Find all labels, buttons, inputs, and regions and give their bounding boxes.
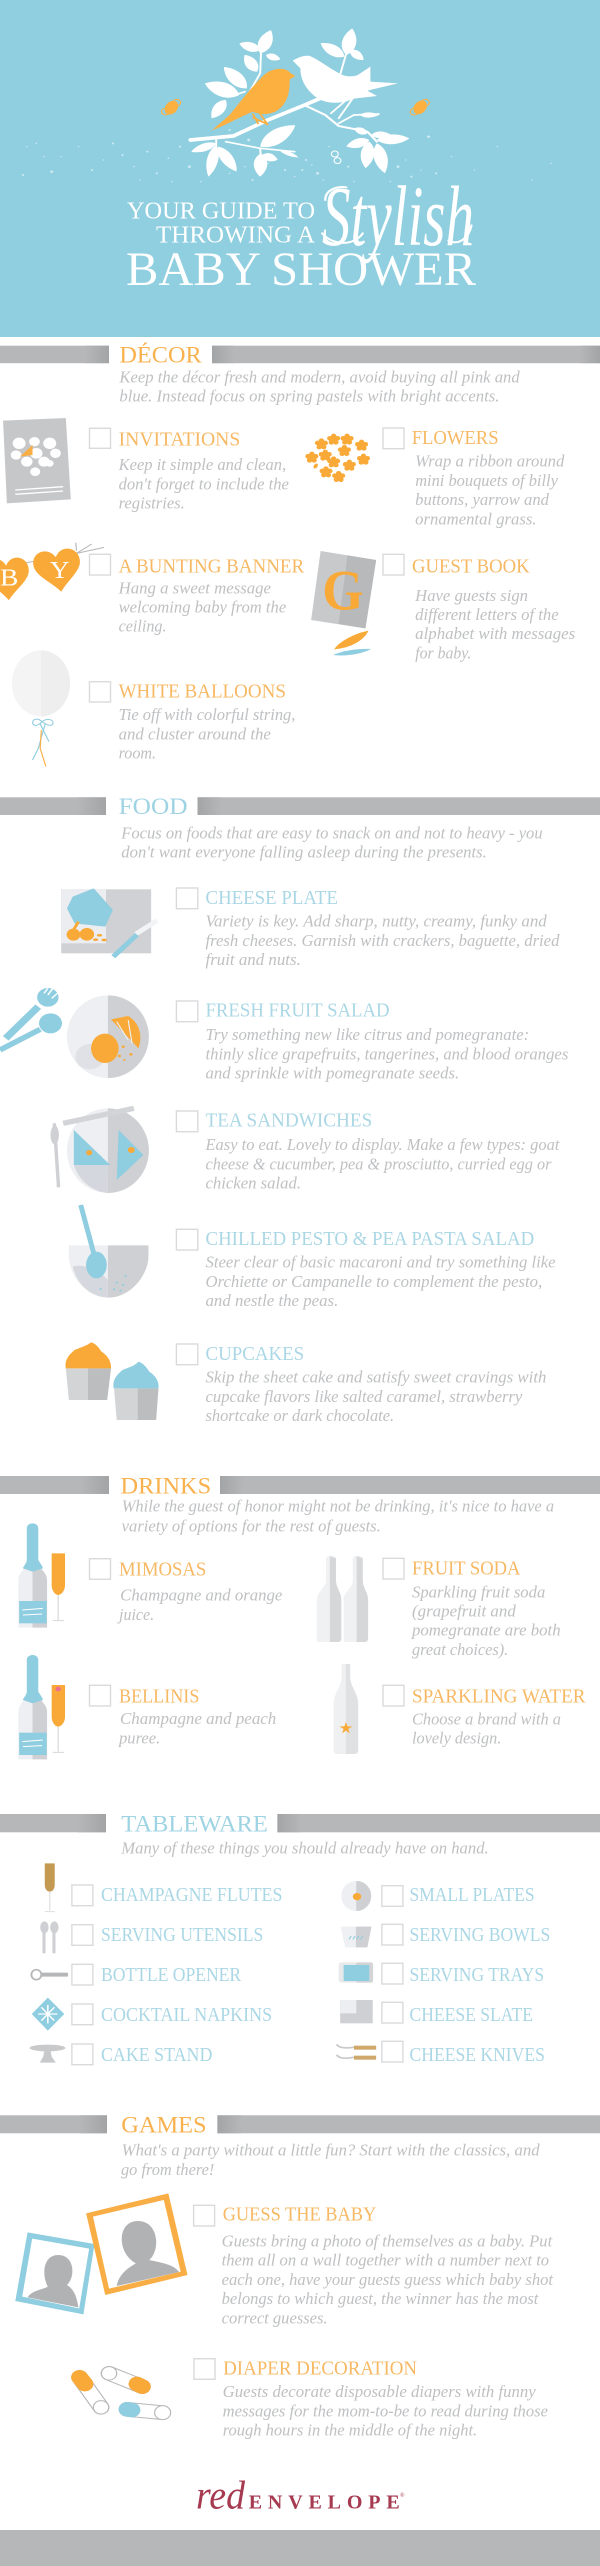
- item: fruit soda: (grapefruit and: [412, 1602, 517, 1621]
- item: bellinis: Champagne and peach: [120, 1709, 276, 1728]
- checklist: tableware left column: CHAMPAGNE FLUTES: [101, 1884, 282, 1906]
- checkboxes left: [72, 1885, 93, 2065]
- item: cupcakes: shortcake or dark chocolate.: [206, 1406, 394, 1425]
- title: Stylish: [322, 168, 474, 264]
- item: cheese plate: fruit and nuts.: [206, 950, 301, 969]
- logo: red envelope: [196, 2472, 405, 2517]
- checkbox: [176, 1111, 198, 1132]
- section heading: drinks: [0, 1473, 600, 1498]
- icon: cupcakes: [66, 1342, 159, 1420]
- item: mimosas: [18, 1523, 282, 1628]
- icon: bees: [161, 98, 430, 164]
- item: bunting banner: A BUNTING BANNER: [119, 555, 305, 577]
- item: cheese plate: CHEESE PLATE: [206, 887, 338, 909]
- logo: red envelope: ENVELOPE: [249, 2491, 400, 2513]
- item: flowers: mini bouquets of billy: [415, 471, 559, 490]
- item: bunting banner: welcoming baby from the: [119, 598, 286, 617]
- item: fresh fruit salad: Try something new like citrus and pomegranate:: [206, 1025, 529, 1044]
- text: games intro: go from there!: [121, 2160, 214, 2179]
- checkbox: [90, 428, 110, 448]
- title: YOUR GUIDE TO: [127, 198, 315, 224]
- checkbox: [383, 1558, 404, 1579]
- section heading: decor: DÉCOR: [119, 343, 202, 368]
- item: invitations: Keep it simple and clean,: [118, 455, 286, 474]
- item: guess the baby: Guests bring a photo of themselves as a baby. Put: [222, 2231, 553, 2250]
- item: guest book: [311, 551, 575, 662]
- item: white balloons: [12, 650, 295, 767]
- item: guest book: for baby.: [415, 643, 471, 662]
- item: diaper decoration: rough hours in the middle of the night.: [223, 2420, 477, 2439]
- item: tea sandwiches: Easy to eat. Lovely to display. Make a few types: goat: [205, 1135, 560, 1154]
- item: diaper decoration: Guests decorate disposable diapers with funny: [223, 2382, 536, 2401]
- text: drinks intro: variety of options for the rest of guests.: [122, 1516, 381, 1535]
- checkbox: [194, 2205, 215, 2226]
- checkbox: [383, 428, 404, 449]
- checklist: tableware right column: SERVING TRAYS: [410, 1964, 544, 1986]
- section heading: games: GAMES: [121, 2112, 207, 2137]
- item: cheese plate: [61, 887, 560, 969]
- icon: flowers: [305, 434, 370, 482]
- item: bellinis: [18, 1655, 276, 1759]
- section heading: food: [0, 794, 600, 819]
- checklist: tableware right column: SERVING BOWLS: [410, 1924, 550, 1946]
- item: fruit soda: FRUIT SODA: [412, 1558, 521, 1580]
- text: decor intro: Keep the décor fresh and modern, avoid buying all pink and: [118, 368, 520, 387]
- item: pasta salad: and nestle the peas.: [206, 1291, 338, 1310]
- checkbox: [383, 1685, 404, 1706]
- icon: sandwiches on plate: [51, 1108, 149, 1193]
- icon: bowl with spoon: [69, 1205, 148, 1298]
- item: fruit soda: great choices).: [412, 1640, 508, 1659]
- item: fresh fruit salad: and sprinkle with pomegranate seeds.: [206, 1063, 459, 1082]
- icon: invitation card: [3, 418, 71, 503]
- item: tea sandwiches: chicken salad.: [206, 1173, 301, 1192]
- text: decor intro: blue. Instead focus on spring pastels with bright accents.: [119, 387, 499, 406]
- text: drinks intro: While the guest of honor might not be drinking, it's nice to have a: [122, 1497, 554, 1516]
- item: diaper decoration: DIAPER DECORATION: [223, 2357, 417, 2379]
- item: fresh fruit salad: FRESH FRUIT SALAD: [206, 1000, 390, 1022]
- item: cheese plate: fresh cheeses. Garnish with crackers, baguette, dried: [206, 931, 560, 950]
- checkboxes right: [382, 1886, 403, 2062]
- checkbox: [176, 1001, 198, 1022]
- item: mimosas: juice.: [117, 1605, 154, 1624]
- section heading: tableware: [0, 1812, 600, 1837]
- checkbox: [176, 888, 198, 909]
- checkbox: [176, 1229, 198, 1250]
- icon: fruit plate and utensils: [0, 987, 149, 1078]
- section heading: tableware: TABLEWARE: [121, 1812, 268, 1837]
- text: drinks intro: [122, 1497, 554, 1535]
- item: guess the baby: [15, 2193, 553, 2327]
- item: tea sandwiches: [51, 1108, 560, 1193]
- item: diaper decoration: messages for the mom-to-be to read during those: [223, 2401, 548, 2420]
- icon: water bottle with star: [334, 1664, 358, 1754]
- item: guest book: Have guests sign: [414, 586, 528, 605]
- item: sparkling water: Choose a brand with a: [412, 1709, 561, 1728]
- checkbox: [90, 554, 110, 575]
- item: fruit soda: Sparkling fruit soda: [412, 1582, 545, 1601]
- header banner: [0, 0, 600, 337]
- checklist: tableware left column: CAKE STAND: [101, 2044, 212, 2066]
- item: guest book: GUEST BOOK: [412, 555, 530, 577]
- item: pasta salad: Steer clear of basic macaroni and try something like: [206, 1253, 556, 1272]
- checklist: tableware right column: SMALL PLATES: [410, 1884, 535, 1906]
- icon: baby photos: [15, 2193, 187, 2314]
- item: bunting banner: ceiling.: [119, 617, 166, 636]
- icon: bunting hearts: [0, 543, 104, 602]
- logo: red envelope: red: [196, 2472, 246, 2517]
- checklist: tableware left column: BOTTLE OPENER: [101, 1964, 242, 1986]
- checklist: tableware right column: CHEESE SLATE: [410, 2004, 533, 2026]
- footer band: [0, 2530, 600, 2566]
- item: flowers: ornamental grass.: [415, 510, 536, 529]
- item: sparkling water: SPARKLING WATER: [412, 1686, 586, 1708]
- item: white balloons: room.: [119, 744, 156, 763]
- item: tea sandwiches: TEA SANDWICHES: [206, 1110, 372, 1132]
- title: [126, 168, 476, 296]
- title: BABY SHOWER: [126, 243, 476, 296]
- item: mimosas: Champagne and orange: [120, 1585, 282, 1604]
- item: cheese plate: Variety is key. Add sharp, nutty, creamy, funky and: [206, 912, 548, 931]
- item: invitations: don't forget to include the: [119, 474, 289, 493]
- checkbox: [90, 1685, 110, 1706]
- checkbox: [383, 554, 404, 575]
- section heading: drinks: DRINKS: [120, 1473, 211, 1498]
- icon: guest book and feathers: G: [322, 559, 364, 622]
- item: fruit soda: pomegranate are both: [411, 1621, 561, 1640]
- icon: bunting hearts: B: [0, 564, 18, 591]
- item: flowers: FLOWERS: [412, 427, 499, 449]
- text: decor intro: [118, 368, 520, 406]
- item: guest book: different letters of the: [415, 605, 559, 624]
- item: guess the baby: them all on a wall together with a number next to: [222, 2251, 549, 2270]
- checklist: tableware left column: COCKTAIL NAPKINS: [101, 2004, 272, 2026]
- item: invitations: [3, 418, 289, 512]
- section heading: food: FOOD: [119, 794, 188, 819]
- icon: orange bird: [212, 69, 295, 131]
- item: sparkling water: lovely design.: [412, 1729, 501, 1748]
- item: white balloons: WHITE BALLOONS: [119, 680, 286, 702]
- item: bunting banner: Hang a sweet message: [118, 578, 271, 597]
- icon: balloon: [12, 650, 70, 767]
- item: guess the baby: correct guesses.: [222, 2308, 328, 2327]
- item: bellinis: BELLINIS: [119, 1686, 199, 1708]
- item: diaper decoration: [80, 2357, 548, 2439]
- item: mimosas: MIMOSAS: [119, 1559, 206, 1581]
- icon: guest book and feathers: [311, 551, 376, 655]
- checklist: tableware left column: [29, 1863, 282, 2066]
- item: guest book: alphabet with messages: [415, 624, 575, 643]
- item: pasta salad: CHILLED PESTO & PEA PASTA SALAD: [206, 1228, 534, 1250]
- icon: cheese board: [61, 888, 157, 957]
- item: cupcakes: cupcake flavors like salted caramel, strawberry: [206, 1387, 523, 1406]
- icon: bunting hearts: Y: [50, 557, 70, 584]
- tableware icons left: [29, 1863, 68, 2063]
- checkbox: [194, 2359, 215, 2379]
- icon: white bird: [293, 56, 398, 103]
- item: fruit soda: [317, 1556, 561, 1659]
- item: guess the baby: belongs to which guest, the winner has the most: [222, 2289, 539, 2308]
- item: invitations: INVITATIONS: [119, 428, 240, 450]
- item: bunting banner: [0, 543, 305, 636]
- text: games intro: [121, 2141, 540, 2179]
- item: flowers: buttons, yarrow and: [415, 490, 550, 509]
- item: invitations: registries.: [119, 493, 185, 512]
- checkbox: [90, 682, 110, 702]
- icon: champagne and flute: [18, 1523, 65, 1628]
- item: cupcakes: CUPCAKES: [206, 1343, 304, 1365]
- illustration: birds on branch: [22, 27, 552, 243]
- section heading: games: [0, 2112, 600, 2137]
- checkbox: [176, 1344, 198, 1365]
- item: pasta salad: [69, 1205, 556, 1310]
- item: white balloons: Tie off with colorful string,: [119, 705, 295, 724]
- checkbox: [90, 1559, 110, 1579]
- checklist: tableware left column: SERVING UTENSILS: [101, 1924, 263, 1946]
- tableware icons right: [337, 1881, 376, 2060]
- text: food intro: Focus on foods that are easy to snack on and not to heavy - you: [120, 823, 543, 842]
- item: guess the baby: each one, have your guests guess which baby shot: [222, 2270, 553, 2289]
- item: flowers: Wrap a ribbon around: [415, 452, 565, 471]
- item: sparkling water: [334, 1664, 586, 1754]
- item: bellinis: puree.: [118, 1728, 160, 1747]
- item: fresh fruit salad: thinly slice grapefruits, tangerines, and blood oranges: [206, 1044, 568, 1063]
- item: guess the baby: GUESS THE BABY: [223, 2204, 376, 2226]
- checklist: tableware right column: CHEESE KNIVES: [410, 2044, 545, 2066]
- title: THROWING A: [156, 222, 316, 248]
- item: fresh fruit salad: [0, 987, 568, 1082]
- icon: safety pins: [80, 2367, 171, 2420]
- item: flowers: [305, 427, 565, 529]
- item: pasta salad: Orchiette or Campanelle to complement the pesto,: [206, 1272, 542, 1291]
- icon: soda bottles: [317, 1556, 368, 1642]
- text: food intro: [120, 823, 543, 862]
- item: cupcakes: Skip the sheet cake and satisfy sweet cravings with: [206, 1368, 546, 1387]
- item: white balloons: and cluster around the: [119, 724, 271, 743]
- text: food intro: don't want everyone falling asleep during the presents.: [121, 843, 487, 862]
- text: tableware intro: Many of these things you should already have on hand.: [120, 1838, 489, 1857]
- checklist: tableware right column: [337, 1881, 550, 2066]
- logo: red envelope: ®: [400, 2492, 405, 2499]
- section heading: decor: [0, 343, 600, 368]
- item: tea sandwiches: cheese & cucumber, pea & prosciutto, curried egg or: [206, 1154, 552, 1173]
- text: games intro: What's a party without a little fun? Start with the classics, and: [122, 2141, 540, 2160]
- icon: champagne and flute: [18, 1655, 65, 1759]
- decorative script swashes: [322, 187, 471, 243]
- item: cupcakes: [66, 1342, 546, 1425]
